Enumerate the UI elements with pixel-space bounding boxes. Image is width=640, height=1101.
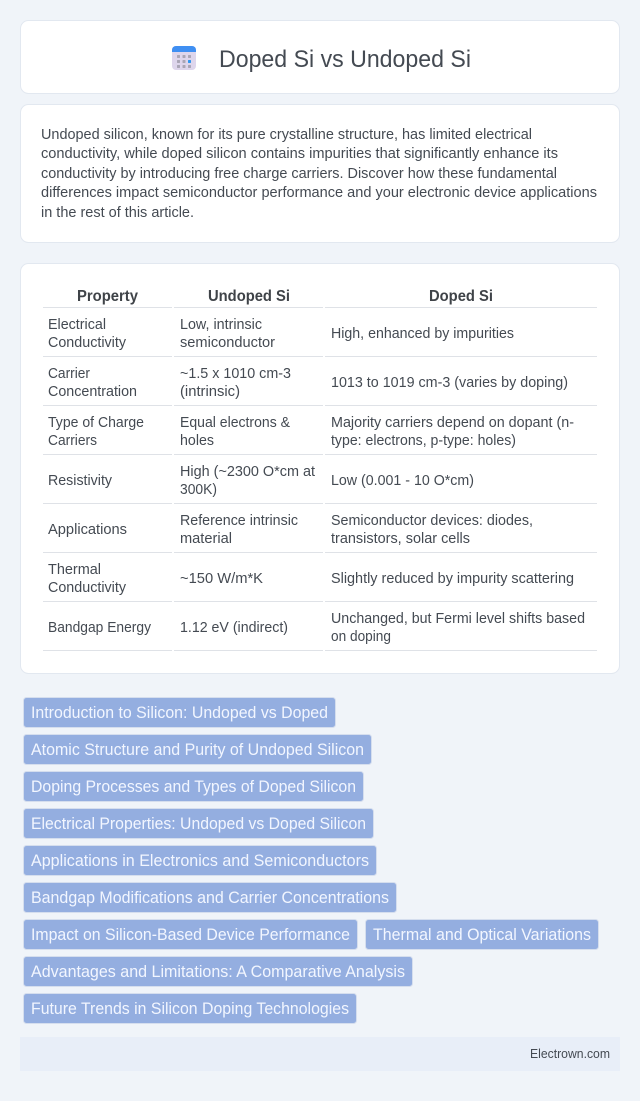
tag: Impact on Silicon-Based Device Performance: [31, 926, 350, 944]
row: type of charge carriers: type: electrons, p-type: holes): [331, 433, 516, 449]
row: carrier concentration: 1013 to 1019 cm-3 (varies by doping): [331, 375, 568, 391]
table header: [77, 288, 493, 305]
table header: Doped Si: [429, 288, 493, 305]
topic tags: [24, 698, 598, 1024]
intro text block: [41, 127, 597, 221]
row: carrier concentration: [48, 366, 568, 400]
row: resistivity: 300K): [180, 482, 217, 498]
row: electrical conductivity: High, enhanced by impurities: [331, 326, 514, 342]
tag: Advantages and Limitations: A Comparative Analysis: [31, 963, 405, 981]
row: type of charge carriers: Equal electrons &: [180, 415, 290, 431]
tag: [24, 846, 376, 876]
tag: Introduction to Silicon: Undoped vs Doped: [31, 704, 328, 722]
row: bandgap energy: [48, 611, 585, 645]
tag: [24, 882, 396, 912]
row: applications: Applications: [48, 522, 127, 538]
row: applications: Semiconductor devices: diodes,: [331, 513, 533, 529]
tag: [24, 956, 412, 986]
tag: [24, 808, 374, 838]
row: type of charge carriers: [48, 415, 574, 449]
tag: Electrical Properties: Undoped vs Doped Silicon: [31, 815, 366, 833]
tag: Bandgap Modifications and Carrier Concentrations: [31, 889, 389, 907]
tag: [24, 734, 372, 764]
header panel: [20, 20, 620, 94]
tag: Thermal and Optical Variations: [373, 926, 591, 944]
row: resistivity: High (~2300 O*cm at: [180, 464, 315, 480]
tag: [366, 920, 598, 950]
intro text block: conductivity by introducing free charge carriers. Discover how these fundamental: [41, 166, 557, 182]
tag: [24, 772, 364, 802]
footer: [20, 1037, 620, 1071]
intro text block: differences impact semiconductor performance and your electronic device applications: [41, 185, 597, 201]
row: thermal conductivity: [48, 562, 574, 596]
row: carrier concentration: ~1.5 x 1010 cm-3: [180, 366, 291, 382]
row: type of charge carriers: Carriers: [48, 433, 97, 449]
row: electrical conductivity: Low, intrinsic: [180, 317, 262, 333]
row: thermal conductivity: Slightly reduced by impurity scattering: [331, 571, 574, 587]
panel: comparison table: [20, 264, 620, 674]
row: bandgap energy: 1.12 eV (indirect): [180, 620, 288, 636]
row: carrier concentration: Concentration: [48, 384, 137, 400]
tag: [24, 994, 356, 1024]
row: type of charge carriers: holes: [180, 433, 214, 449]
row: carrier concentration: Carrier: [48, 366, 90, 382]
row: type of charge carriers: Type of Charge: [48, 415, 144, 431]
row: bandgap energy: Bandgap Energy: [48, 620, 152, 636]
intro text block: Undoped silicon, known for its pure crystalline structure, has limited electrical: [41, 127, 532, 143]
row: applications: material: [180, 531, 232, 547]
tag: Future Trends in Silicon Doping Technologies: [31, 1000, 349, 1018]
row: electrical conductivity: semiconductor: [180, 335, 275, 351]
row: bandgap energy: on doping: [331, 629, 391, 645]
panel: introduction: [20, 104, 620, 242]
row: type of charge carriers: Majority carriers depend on dopant (n-: [331, 415, 574, 431]
row: applications: Reference intrinsic: [180, 513, 298, 529]
intro text block: in the rest of this article.: [41, 205, 194, 221]
row: applications: transistors, solar cells: [331, 531, 470, 547]
table header: Property: [77, 288, 138, 305]
row: carrier concentration: (intrinsic): [180, 384, 240, 400]
row: applications: [48, 513, 533, 547]
tag: Doping Processes and Types of Doped Silicon: [31, 778, 356, 796]
tag: [24, 920, 358, 950]
row: bandgap energy: Unchanged, but Fermi level shifts based: [331, 611, 585, 627]
row: thermal conductivity: ~150 W/m*K: [180, 571, 263, 587]
intro text block: conductivity, while doped silicon contains impurities that significantly enhance its: [41, 146, 558, 162]
row: resistivity: Resistivity: [48, 473, 113, 489]
footer credit: Electrown.com: [530, 1046, 610, 1061]
row: thermal conductivity: Conductivity: [48, 580, 127, 596]
title: Doped Si vs Undoped Si: [219, 46, 471, 73]
row: resistivity: [48, 464, 474, 498]
tag: Atomic Structure and Purity of Undoped Silicon: [31, 741, 364, 759]
icon: calendar grid: [172, 46, 196, 70]
row: electrical conductivity: Electrical: [48, 317, 106, 333]
row: resistivity: Low (0.001 - 10 O*cm): [331, 473, 474, 489]
table header: Undoped Si: [208, 288, 290, 305]
row: electrical conductivity: Conductivity: [48, 335, 127, 351]
row: electrical conductivity: [48, 317, 514, 351]
tag: Applications in Electronics and Semiconductors: [31, 852, 369, 870]
row: thermal conductivity: Thermal: [48, 562, 101, 578]
tag: [24, 698, 336, 728]
